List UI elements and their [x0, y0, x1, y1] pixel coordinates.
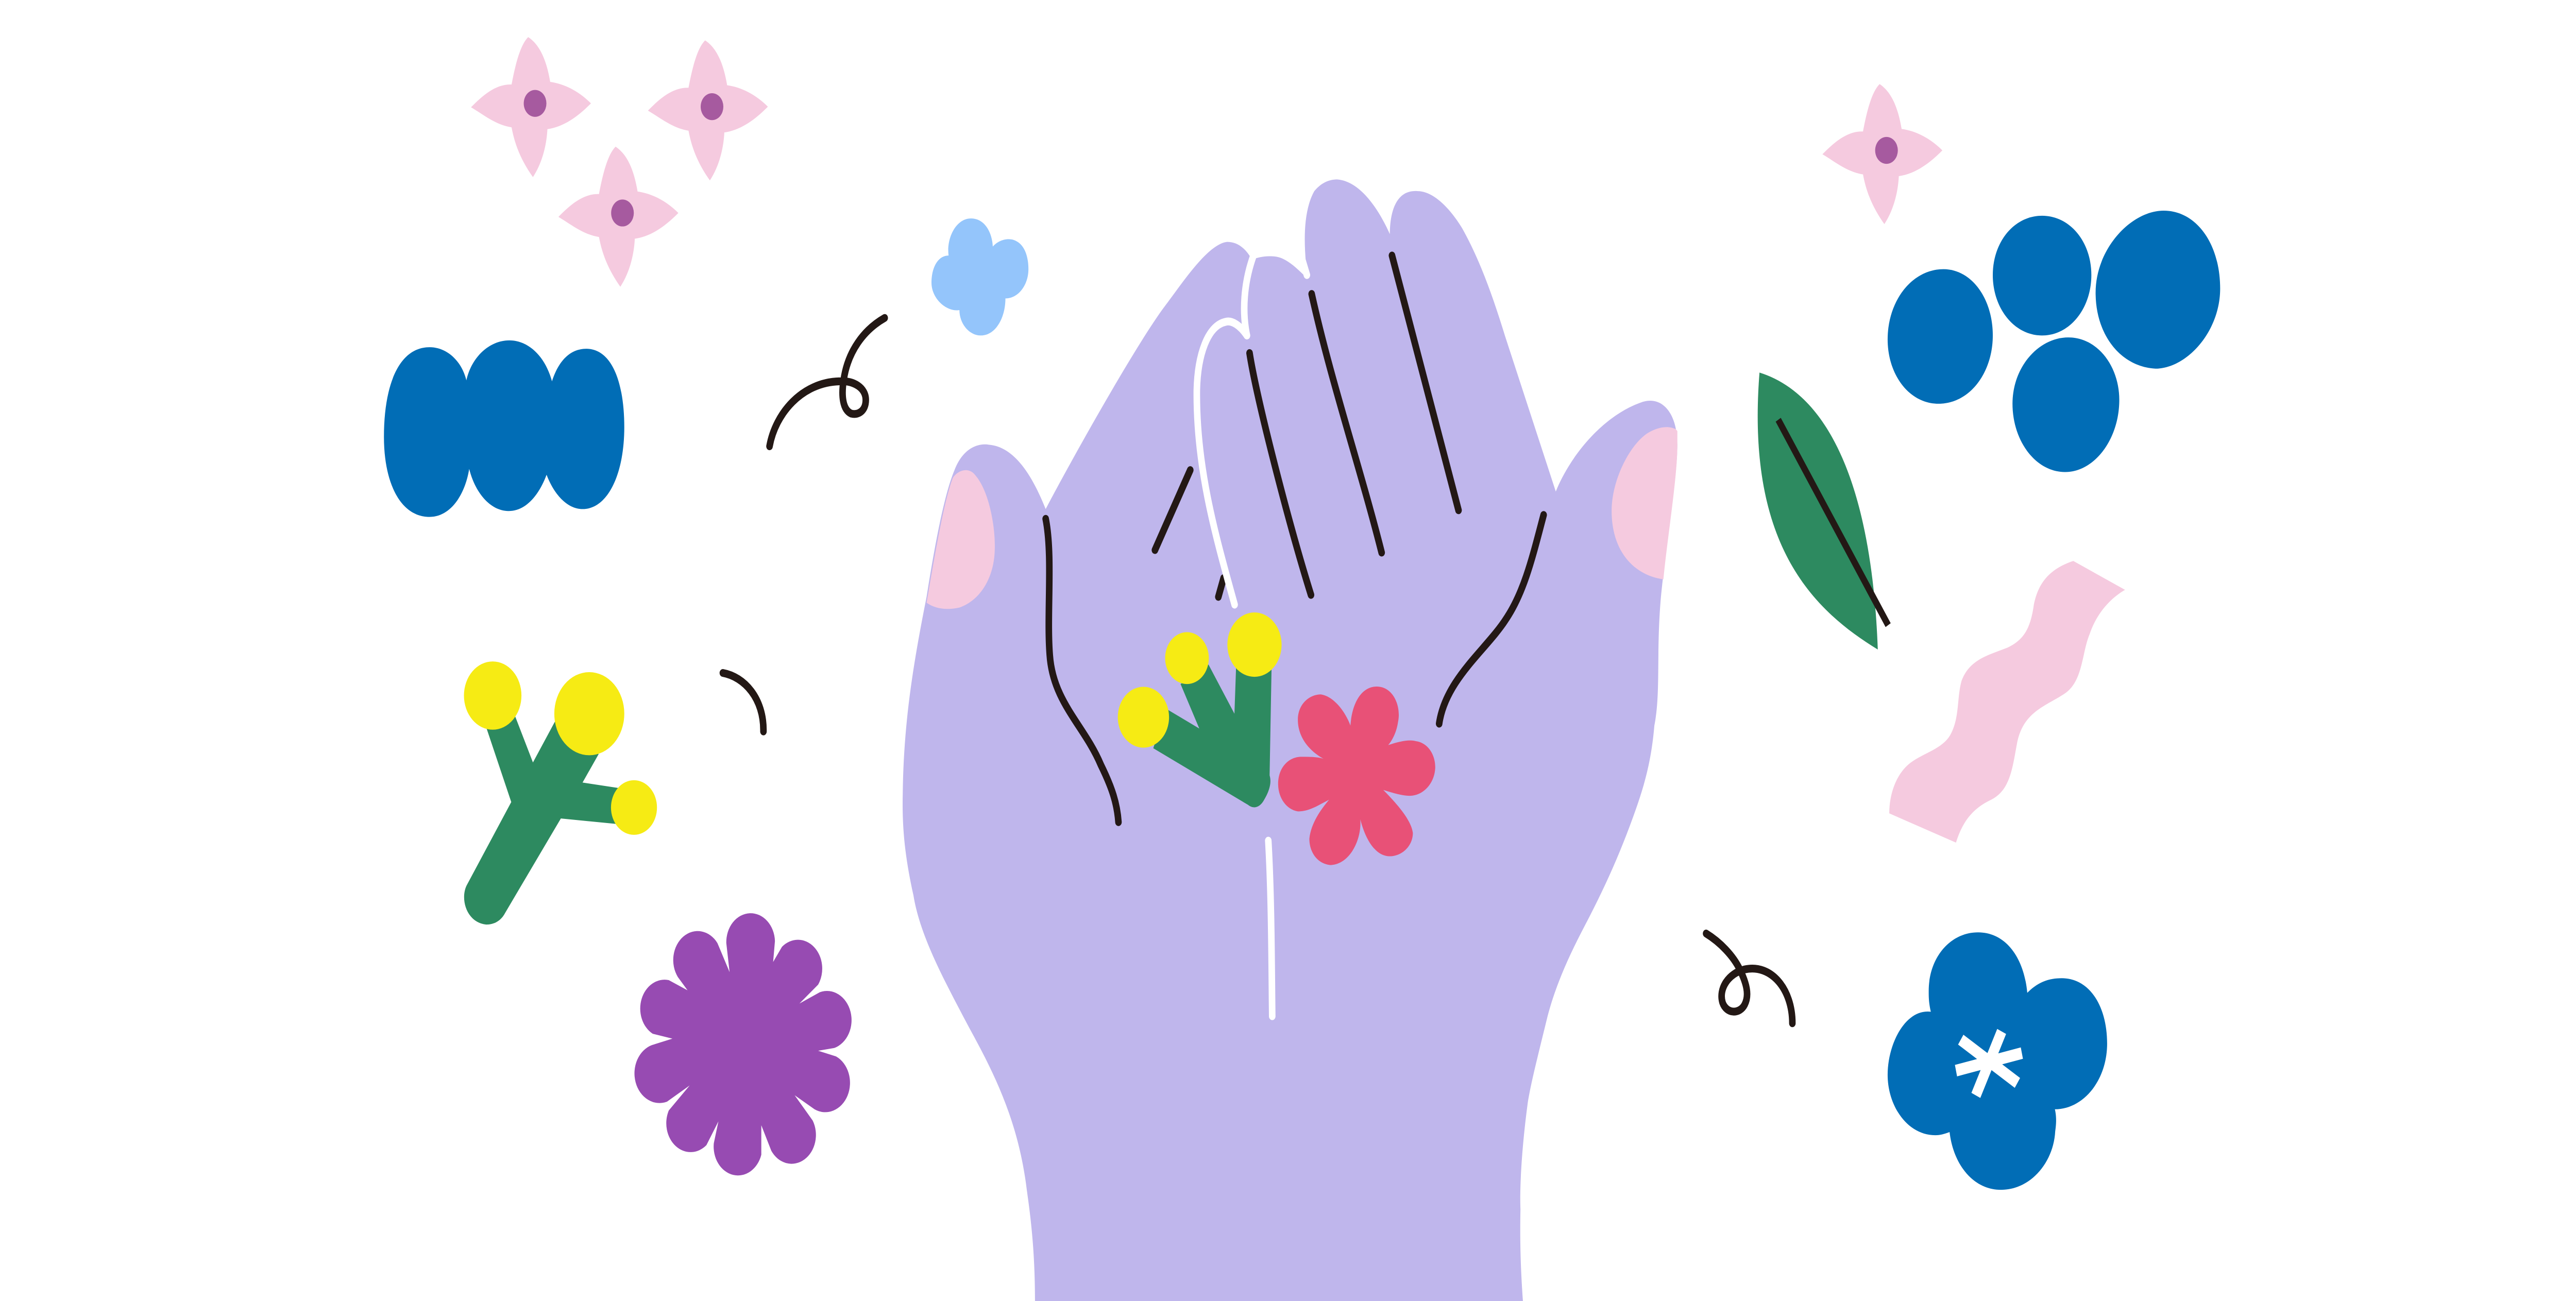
hand silhouette: [903, 179, 1677, 1301]
icon: pink wavy ribbon: [1889, 561, 2125, 843]
icon: four blue berries: [1888, 211, 2220, 472]
icon: light blue flower: [931, 218, 1028, 335]
icon: black loop squiggle bottom right: [1706, 934, 1792, 1023]
icon: green leaf with black vein: [1758, 372, 1888, 649]
red six-petal flower on palm: [1278, 687, 1435, 865]
icon: green branch with yellow buds: [464, 661, 657, 925]
white finger contour lines: [1197, 255, 1307, 1016]
icon: purple ten-petal flower: [634, 913, 852, 1175]
palm crease lines: [1046, 255, 1544, 822]
green sprig with yellow buds on palm: [1118, 612, 1282, 807]
thumb-side pink fingertip: [926, 470, 995, 609]
icon: black loop squiggle top left: [770, 318, 885, 446]
icon: small black arc: [723, 673, 764, 731]
icon: blue four-petal flower with white asterisk: [1888, 932, 2107, 1190]
hand: open palm with details: [903, 179, 1677, 1301]
icon: pink four-petal flower right: [1822, 84, 1942, 224]
icon: pink four-petal flower cluster: [471, 37, 768, 287]
icon: blue three-lobed blob: [384, 340, 624, 517]
right pink fingertip: [1612, 427, 1677, 579]
